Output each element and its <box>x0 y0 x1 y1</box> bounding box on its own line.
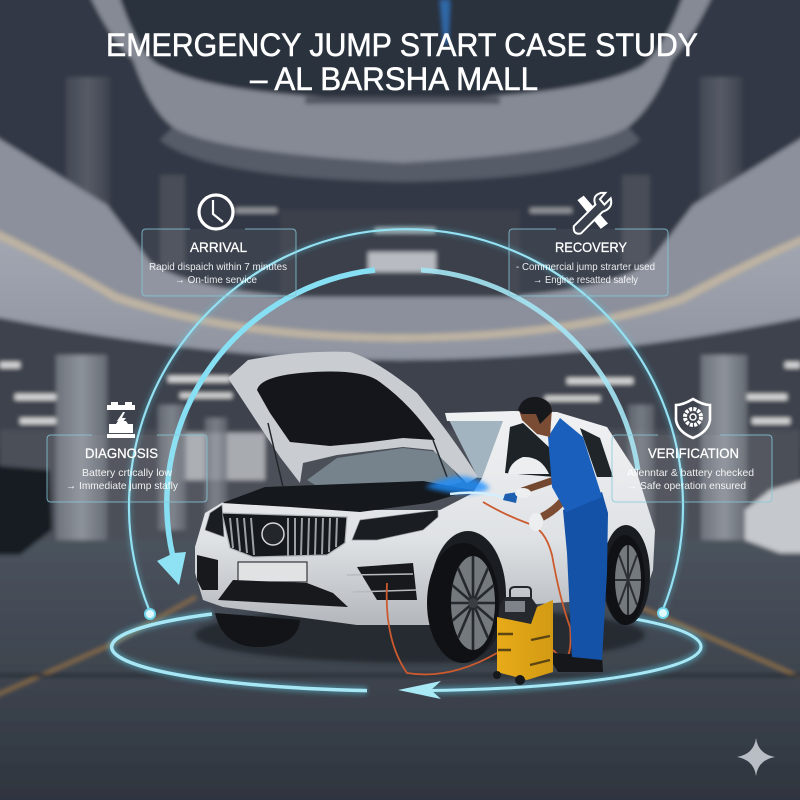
orange jump cables <box>387 502 571 674</box>
heading: VERIFICATION <box>648 445 739 461</box>
body text: → Engine resatted safely <box>533 274 639 286</box>
panel: diagnosis <box>47 435 207 502</box>
wing mirror <box>508 457 549 474</box>
headlights <box>205 505 438 540</box>
panel box <box>47 435 207 502</box>
icon: wrench and screwdriver <box>574 193 611 234</box>
front wheel <box>427 531 506 663</box>
title: EMERGENCY JUMP START CASE STUDY <box>106 27 698 63</box>
trousers <box>563 492 608 660</box>
car shadow <box>195 607 645 663</box>
yellow jump starter <box>493 587 553 685</box>
outer arc <box>129 229 683 612</box>
starter vents <box>498 634 550 665</box>
heading: DIAGNOSIS <box>85 445 158 461</box>
floor ring <box>112 614 701 699</box>
panel box <box>612 435 772 502</box>
body text <box>149 261 287 286</box>
icon: sparkle watermark <box>737 738 775 776</box>
panel: arrival <box>142 229 296 296</box>
hair <box>518 397 552 424</box>
body text <box>516 261 655 286</box>
forearm one <box>522 479 557 491</box>
body text: - Commercial jump strarter used <box>516 261 655 273</box>
title <box>106 27 698 97</box>
starter control unit <box>498 597 538 624</box>
shoes <box>553 653 603 672</box>
icon: clock <box>199 195 233 229</box>
panel: recovery <box>509 229 668 296</box>
body text: → Immediate jump stafly <box>66 480 179 492</box>
side windows <box>505 423 555 477</box>
starter screen <box>505 601 525 612</box>
panel: verification <box>612 435 772 502</box>
arc node left <box>145 609 155 619</box>
right inner arc <box>421 270 638 470</box>
shirt <box>548 418 602 512</box>
body text <box>66 467 179 492</box>
body text: → On-time service <box>175 274 257 286</box>
starter handle <box>510 587 531 598</box>
body text <box>627 467 754 492</box>
lower intakes <box>197 555 417 607</box>
title: – AL BARSHA MALL <box>250 61 538 97</box>
hood underside <box>257 372 435 446</box>
left arrowhead <box>157 552 186 585</box>
windshield <box>447 416 505 478</box>
engine bay <box>222 481 472 512</box>
rear wheel <box>602 525 650 625</box>
windshield lower part <box>307 448 462 488</box>
floor ring arrowhead <box>398 681 441 699</box>
starter wheels <box>493 671 525 685</box>
body text: Allenntar & battery checked <box>627 467 754 479</box>
heading: RECOVERY <box>555 239 628 255</box>
technician in blue overalls <box>515 397 608 672</box>
process arcs <box>129 229 683 619</box>
front-left tire <box>215 613 300 647</box>
electric sparks <box>425 476 518 503</box>
gloves <box>515 488 543 531</box>
panel box <box>509 229 668 296</box>
open hood <box>228 352 478 483</box>
hood struts <box>268 423 447 487</box>
icon: shield with gear <box>676 399 710 438</box>
heading: ARRIVAL <box>190 239 247 255</box>
grille <box>222 513 347 557</box>
left inner arc <box>167 270 375 557</box>
starter case <box>497 600 553 680</box>
car: white SUV with open hood <box>195 352 655 663</box>
forearm two <box>542 475 578 517</box>
license plate <box>238 562 307 582</box>
panel box <box>142 229 296 296</box>
car body <box>195 411 655 625</box>
emblem <box>262 523 284 545</box>
body text: Battery crtically low <box>82 467 172 479</box>
icon: battery <box>107 402 135 438</box>
body text: → Safe operation ensured <box>627 480 746 492</box>
arc node right <box>658 608 668 618</box>
head <box>519 398 552 437</box>
body text: Rapid dispaich within 7 minutes <box>149 261 287 273</box>
